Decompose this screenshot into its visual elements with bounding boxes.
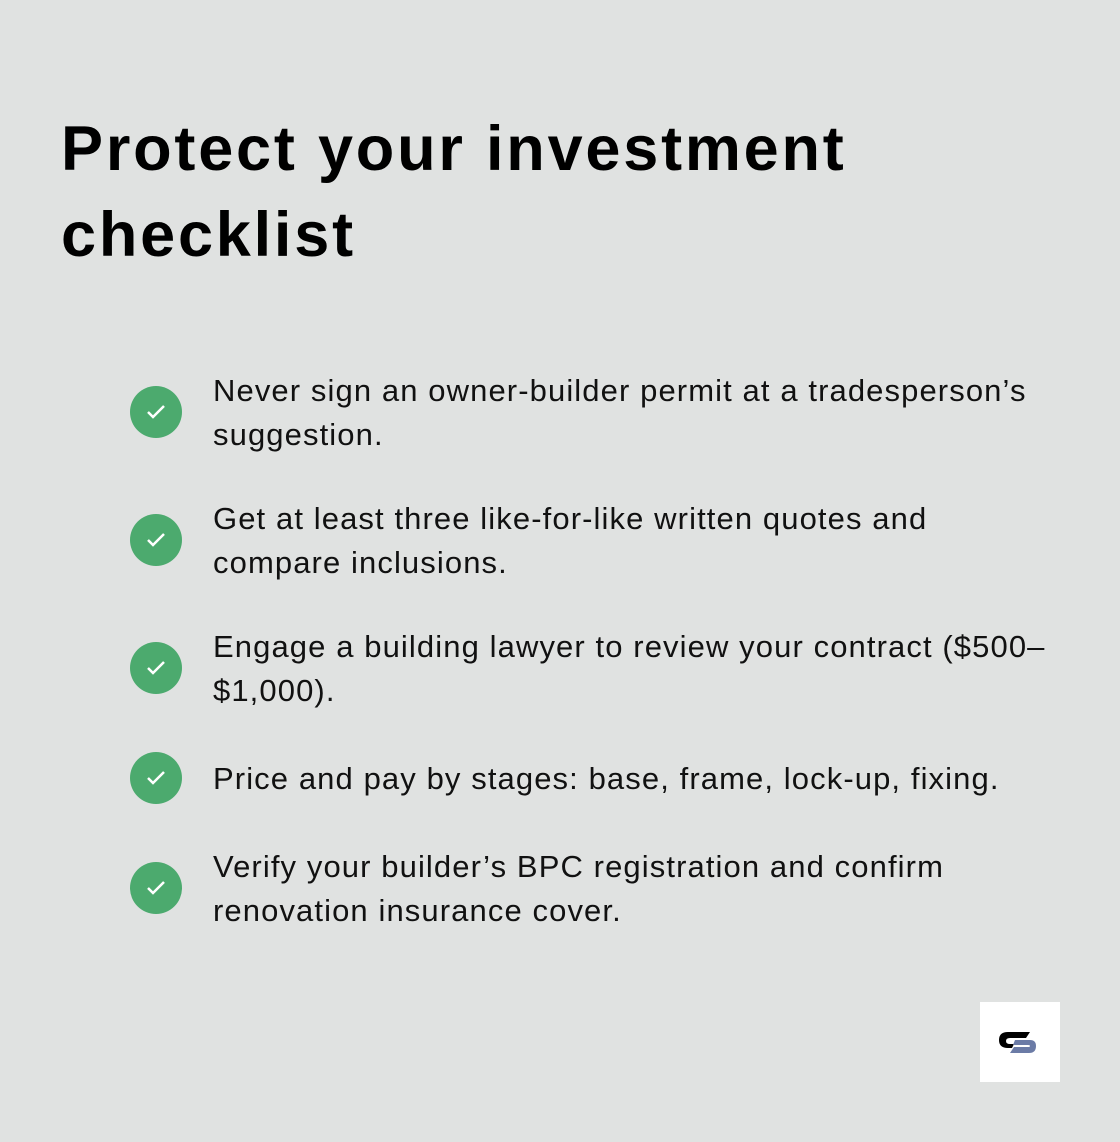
icon: check: [130, 642, 182, 694]
text 2: Get at least three like-for-like written quotes and: [213, 501, 927, 536]
title: checklist: [61, 200, 356, 270]
item 2: [130, 501, 927, 580]
text 1: [213, 373, 1027, 452]
icon: check: [130, 514, 182, 566]
text 2: compare inclusions.: [213, 545, 508, 580]
item 3: [130, 629, 1046, 708]
item 1: [130, 373, 1027, 452]
text 2: [213, 501, 927, 580]
item 4: [130, 752, 1000, 804]
text 3: [213, 629, 1046, 708]
text 5: renovation insurance cover.: [213, 893, 622, 928]
text 1: Never sign an owner-builder permit at a tradesperson’s: [213, 373, 1027, 408]
text 1: suggestion.: [213, 417, 384, 452]
icon: check: [130, 862, 182, 914]
text 3: Engage a building lawyer to review your contract ($500–: [213, 629, 1046, 664]
icon: check: [130, 386, 182, 438]
text 5: [213, 849, 944, 928]
icon: check: [130, 752, 182, 804]
title: [61, 114, 847, 270]
text 3: $1,000).: [213, 673, 336, 708]
title: Protect your investment: [61, 114, 847, 184]
item 5: [130, 849, 944, 928]
text 5: Verify your builder’s BPC registration and confirm: [213, 849, 944, 884]
text 4: Price and pay by stages: base, frame, lock-up, fixing.: [213, 761, 1000, 796]
logo: [980, 1002, 1060, 1082]
